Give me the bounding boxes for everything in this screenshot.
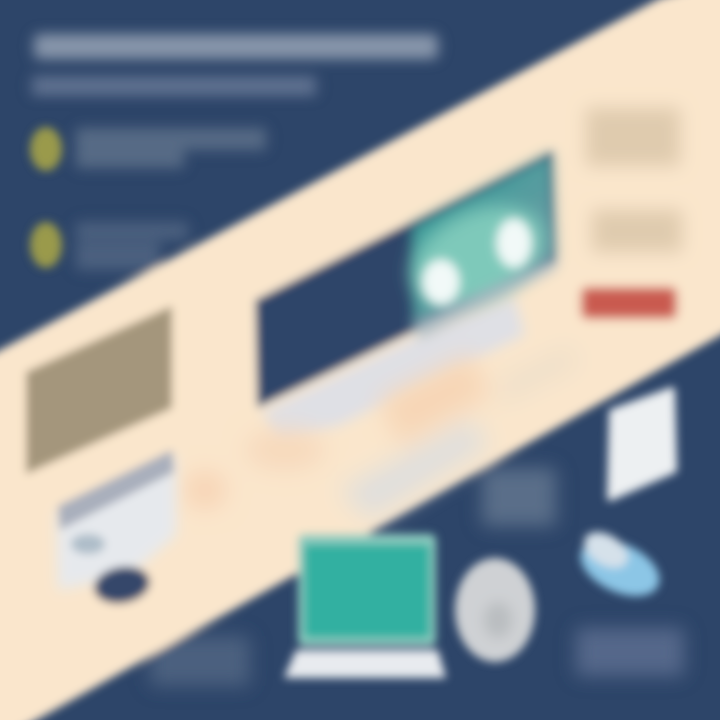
card body	[56, 455, 176, 590]
panel: left tan parallelogram	[26, 306, 172, 474]
globe centre	[484, 602, 512, 638]
cloud body	[572, 528, 668, 608]
screen background	[255, 150, 556, 408]
text block: list item one	[76, 128, 266, 168]
icon: cloud	[572, 525, 668, 608]
icon: white document	[610, 390, 674, 498]
white circle left	[422, 259, 460, 305]
icon: laptop	[284, 534, 446, 678]
panel: dark screen	[255, 150, 560, 408]
light teal blob	[396, 186, 560, 326]
card chip	[71, 534, 105, 554]
text block: lower left	[150, 636, 250, 686]
lower haze	[412, 258, 556, 338]
laptop base	[284, 650, 446, 678]
laptop screen frame	[298, 534, 436, 646]
icon: globe	[455, 558, 535, 662]
teal chart area	[412, 152, 556, 326]
text block: lower centre	[482, 468, 556, 526]
button: red	[582, 288, 676, 318]
panel: small card	[56, 450, 176, 608]
laptop screen	[304, 544, 430, 638]
title	[34, 34, 438, 59]
peach and grey keyboard area	[185, 345, 580, 520]
card header bar	[58, 450, 174, 530]
subtitle	[32, 76, 316, 96]
globe body	[455, 558, 535, 662]
panel: tan text box middle	[592, 210, 682, 252]
panel: tan text box top	[586, 108, 680, 166]
lavender strip below screen	[262, 298, 525, 440]
white circle right	[496, 218, 532, 268]
cloud highlight	[578, 525, 634, 575]
text block: lower right	[576, 628, 684, 676]
dark oval	[91, 562, 153, 608]
icon: yellow badge one	[30, 127, 62, 171]
icon: yellow badge two	[30, 222, 62, 268]
text block: list item two	[76, 222, 188, 270]
